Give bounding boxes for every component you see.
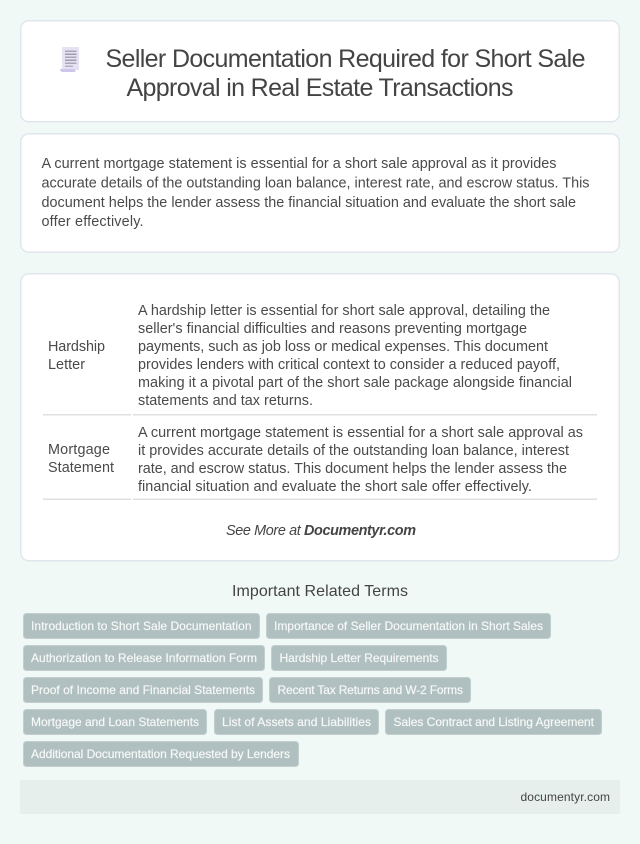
summary text xyxy=(42,156,590,230)
chip xyxy=(386,710,602,734)
panel: documents table xyxy=(21,274,619,561)
chip: List of Assets and Liabilities xyxy=(222,715,371,729)
icon: document xyxy=(60,47,79,72)
chip: Mortgage and Loan Statements xyxy=(31,715,199,729)
chip xyxy=(24,646,264,670)
heading: related terms: Important Related Terms xyxy=(232,583,408,600)
panel: summary xyxy=(21,134,619,252)
description: hardship letter: statements and tax returns. xyxy=(138,393,313,409)
chip: Introduction to Short Sale Documentation xyxy=(31,619,252,633)
chip xyxy=(24,678,262,702)
chip: Importance of Seller Documentation in Short Sales xyxy=(274,619,543,633)
summary text: A current mortgage statement is essential for a short sale approval as it provides xyxy=(42,156,556,172)
chip xyxy=(214,710,378,734)
description: mortgage statement: it provides accurate details of the outstanding loan balance, interest xyxy=(138,443,569,459)
title xyxy=(106,45,586,102)
description: hardship letter: payments, such as job loss or medical expenses. This document xyxy=(138,339,548,355)
chip: Recent Tax Returns and W-2 Forms xyxy=(278,683,463,697)
chip xyxy=(272,646,446,670)
chip: Sales Contract and Listing Agreement xyxy=(394,715,595,729)
chip: Additional Documentation Requested by Lenders xyxy=(31,747,290,761)
label: mortgage statement xyxy=(48,442,114,476)
chip: Proof of Income and Financial Statements xyxy=(31,683,255,697)
description: mortgage statement: financial situation and evaluate the short sale offer effectively. xyxy=(138,479,532,495)
description: mortgage statement: A current mortgage statement is essential for a short sale approval as xyxy=(138,425,583,441)
chip xyxy=(270,678,470,702)
description: hardship letter xyxy=(138,303,572,409)
row: hardship letter xyxy=(48,303,572,409)
label: hardship letter: Letter xyxy=(48,357,85,373)
description: hardship letter: A hardship letter is essential for short sale approval, detailing the xyxy=(138,303,550,319)
chip xyxy=(24,710,206,734)
title: Seller Documentation Required for Short Sale xyxy=(106,45,586,73)
footer xyxy=(20,780,620,814)
chip xyxy=(24,614,260,638)
summary text: document helps the lender assess the financial situation and evaluate the short sale xyxy=(42,195,576,211)
description: hardship letter: provides lenders with critical context to consider a reduced payoff, xyxy=(138,357,560,373)
title: Approval in Real Estate Transactions xyxy=(126,74,514,102)
row: mortgage statement xyxy=(48,425,583,495)
summary text: offer effectively. xyxy=(42,214,144,230)
description: mortgage statement xyxy=(138,425,583,495)
label: hardship letter xyxy=(48,339,105,373)
footer source: documentyr.com xyxy=(520,790,610,804)
see more link: See More at Documentyr.com xyxy=(226,523,416,539)
chip: Hardship Letter Requirements xyxy=(280,651,438,665)
chip: Authorization to Release Information Form xyxy=(31,651,257,665)
label: mortgage statement: Statement xyxy=(48,460,114,476)
panel: header xyxy=(21,21,619,122)
description: hardship letter: making it a pivotal part of the short sale package alongside financial xyxy=(138,375,572,391)
chip xyxy=(266,614,550,638)
label: hardship letter: Hardship xyxy=(48,339,105,355)
description: hardship letter: seller's financial difficulties and reasons preventing mortgage xyxy=(138,321,527,337)
summary text: accurate details of the outstanding loan balance, interest rate, and escrow status. This xyxy=(42,176,590,192)
label: mortgage statement: Mortgage xyxy=(48,442,110,458)
related terms chips xyxy=(24,614,602,766)
chip xyxy=(24,742,298,766)
description: mortgage statement: rate, and escrow status. This document helps the lender assess the xyxy=(138,461,567,477)
